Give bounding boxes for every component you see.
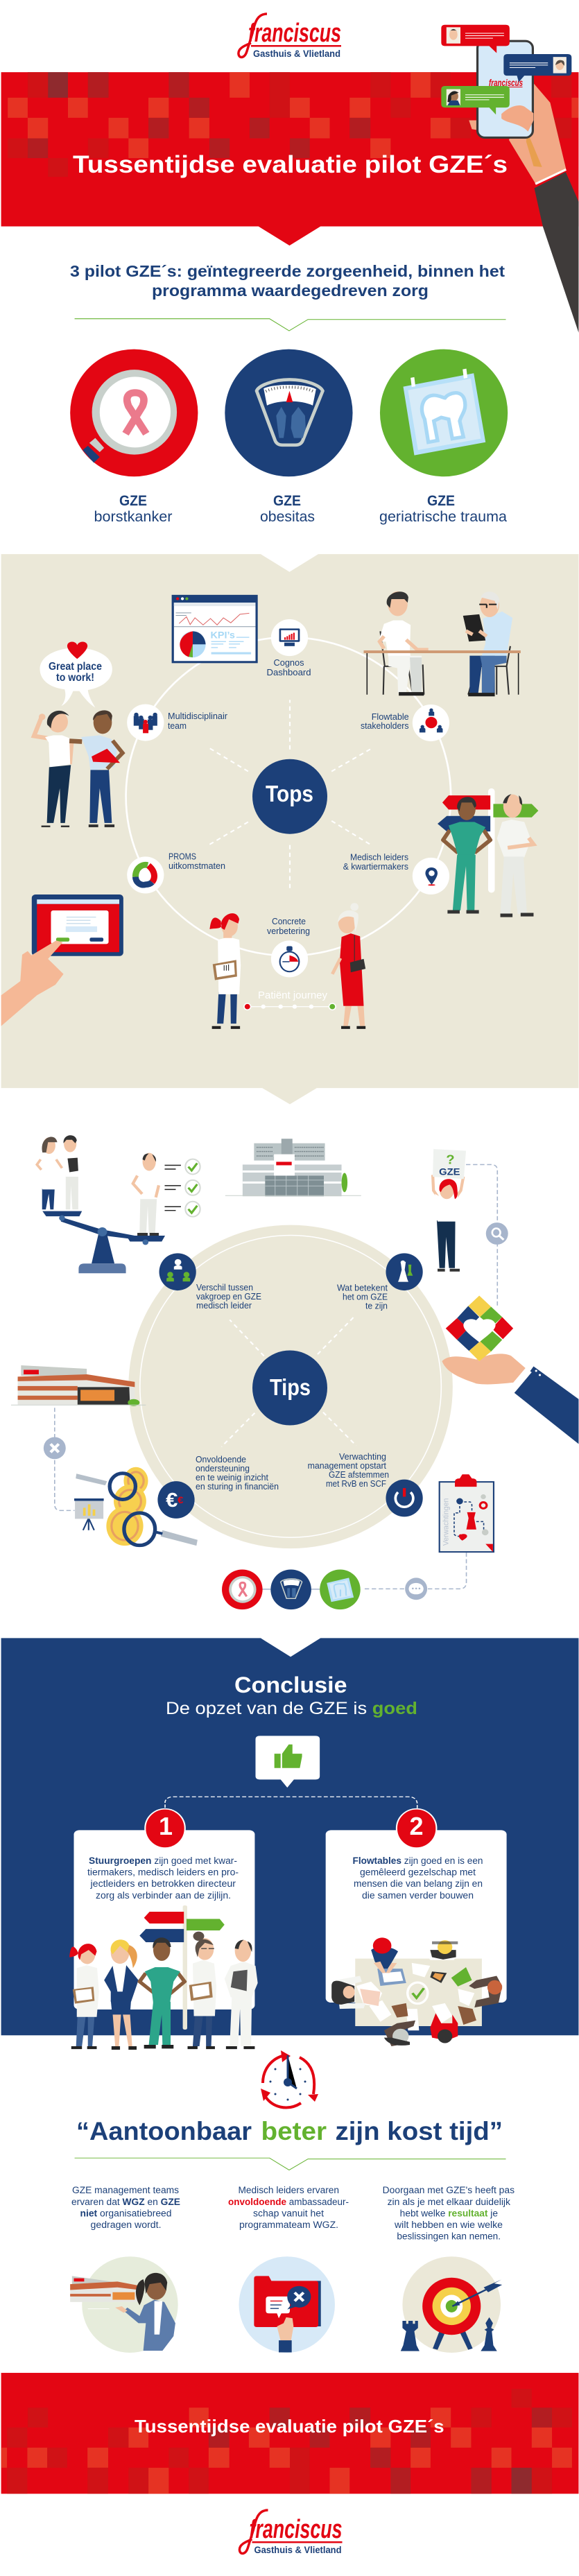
- finding 3 text: beslissingen kan nemen.: [397, 2231, 501, 2241]
- panel: Conclusie: [1, 1638, 578, 2050]
- footer banner: Tussentijdse evaluatie pilot GZE´s: [135, 2416, 444, 2437]
- icon: x-ray of pelvis: [380, 349, 508, 476]
- PROMS icon and label: uitkomstmaten: [168, 861, 225, 871]
- card 1: Stuurgroepen: tiermakers, medisch leiders en pro-: [87, 1867, 239, 1878]
- Medisch leiders icon and label: [343, 852, 449, 894]
- illustration: KPI dashboard: KPI’s: [211, 630, 235, 641]
- Wat betekent het om GZE label with icon: [337, 1253, 423, 1311]
- finding 3 text: wilt hebben en wie welke: [394, 2220, 503, 2230]
- label: GZE borstkanker: borstkanker: [94, 509, 173, 525]
- hero title: Tussentijdse evaluatie pilot GZE´s: [73, 151, 508, 178]
- illustration: people at signpost: [438, 788, 538, 917]
- dashed connector: [165, 1797, 417, 1809]
- quote heading: beter: [261, 2117, 327, 2145]
- illustration: KPI dashboard: [172, 595, 258, 663]
- card 2: Flowtables: mensen die van belang zijn en: [354, 1878, 483, 1889]
- finding 3 text: zin als je met elkaar duidelijk: [388, 2197, 510, 2207]
- finding 2 text: [228, 2185, 349, 2230]
- finding 3 illustration: [401, 2256, 502, 2353]
- Verschil tussen vakgroep label with icon: [159, 1253, 261, 1311]
- Verschil tussen vakgroep label with icon: medisch leider: [196, 1300, 252, 1311]
- Tops centre circle: Tops: [266, 781, 313, 806]
- beige background and ring: [1, 554, 578, 1105]
- card 1: Stuurgroepen: Stuurgroepen zijn goed met kwar-: [89, 1856, 237, 1866]
- finding 2 text: schap vanuit het: [253, 2208, 324, 2219]
- illustration: Great place to work team: Great place: [49, 661, 102, 673]
- panel: Tips: [11, 1135, 578, 1609]
- Medisch leiders icon and label: Medisch leiders: [350, 852, 408, 863]
- illustration: woman holding GZE question sign: [433, 1149, 508, 1306]
- intro heading: [70, 262, 505, 300]
- label: GZE obesitas: obesitas: [260, 509, 315, 525]
- Verwachting management label with power icon: GZE afstemmen: [329, 1469, 389, 1480]
- illustration: Great place to work team: [34, 641, 123, 827]
- header logo: Gasthuis & Vlietland: [253, 48, 340, 59]
- card 2: Flowtables: 2: [409, 1812, 424, 1840]
- Onvoldoende ondersteuning label with euro icon: en te weinig inzicht: [196, 1472, 268, 1483]
- Onvoldoende ondersteuning label with euro icon: Onvoldoende: [196, 1454, 246, 1464]
- intro heading: programma waardegedreven zorg: [152, 282, 429, 300]
- label: GZE obesitas: GZE: [273, 493, 301, 509]
- red banner background: [1, 72, 578, 245]
- Tips centre circle: Tips: [270, 1374, 311, 1400]
- Flowtable stakeholders icon and label: stakeholders: [361, 720, 409, 731]
- finding 1 text: [71, 2185, 180, 2230]
- label: GZE borstkanker: GZE: [119, 493, 147, 509]
- panel: Tops: [1, 554, 578, 1105]
- illustration: expectations clipboard: Verwachtingen: [442, 1498, 451, 1546]
- icon: thumbs up bubble: [255, 1736, 320, 1788]
- card 2: Flowtables: [326, 1809, 507, 2003]
- illustration: nurse and patient with patient journey: [209, 903, 365, 1029]
- quote heading: “Aantoonbaar: [76, 2117, 252, 2145]
- label: GZE geriatrische trauma: GZE: [427, 493, 455, 509]
- card 1: Stuurgroepen: 1: [159, 1812, 173, 1840]
- illustration: two people at a table: [364, 591, 521, 696]
- finding 3 text: hebt welke resultaat je: [400, 2208, 498, 2219]
- Cognos Dashboard icon and label: Dashboard: [266, 667, 311, 677]
- label: GZE geriatrische trauma: [379, 493, 507, 525]
- illustration: coins, magnifiers and presentation board: [44, 1408, 198, 1546]
- footer logo: [239, 2510, 343, 2555]
- finding 1 text: ervaren dat WGZ en GZE: [71, 2197, 180, 2207]
- finding 1 text: gedragen wordt.: [90, 2220, 161, 2230]
- illustration: expectations clipboard: [364, 1474, 494, 1589]
- Onvoldoende ondersteuning label with euro icon: €: [178, 1495, 183, 1506]
- Verwachting management label with power icon: management opstart: [308, 1460, 386, 1471]
- header logo: franciscus: [248, 19, 341, 48]
- Verwachting management label with power icon: Verwachting: [339, 1451, 386, 1462]
- Flowtable stakeholders icon and label: Flowtable: [372, 711, 409, 722]
- conclusion heading: De opzet van de GZE is goed: [166, 1699, 417, 1718]
- finding 2 text: Medisch leiders ervaren: [239, 2185, 339, 2195]
- icon: clock with red cycle arrows: [261, 2050, 318, 2107]
- finding 1 text: GZE management teams: [72, 2185, 179, 2195]
- navy background: [1, 1638, 578, 2035]
- conclusion heading: Conclusie: [234, 1672, 347, 1697]
- Multidisciplinair team icon and label: team: [168, 720, 187, 731]
- Concrete verbetering icon and label: [267, 916, 310, 977]
- Onvoldoende ondersteuning label with euro icon: €: [166, 1489, 178, 1512]
- Verwachting management label with power icon: [308, 1451, 423, 1516]
- Onvoldoende ondersteuning label with euro icon: [157, 1454, 279, 1519]
- panel: three findings: [70, 2185, 515, 2353]
- Onvoldoende ondersteuning label with euro icon: en sturing in financiën: [196, 1481, 279, 1492]
- icon: weighing scale: [225, 349, 353, 476]
- card 1: Stuurgroepen: zorg als verbinder aan de zijlijn.: [96, 1890, 231, 1901]
- illustration: woman holding GZE question sign: ?: [446, 1152, 455, 1167]
- label: GZE geriatrische trauma: geriatrische trauma: [379, 509, 507, 525]
- PROMS icon and label: [127, 852, 225, 893]
- Wat betekent het om GZE label with icon: het om GZE: [343, 1291, 388, 1302]
- finding 2 text: programmateam WGZ.: [239, 2220, 338, 2230]
- finding 2 illustration: [239, 2256, 335, 2353]
- beige disc with ring and arrows: [128, 1225, 453, 1548]
- illustration: balance scale with people and checklist: [37, 1135, 200, 1273]
- label: GZE obesitas: [260, 493, 315, 525]
- illustration: Gasthuis hospital building: [225, 1139, 361, 1196]
- finding 1 illustration: [70, 2256, 178, 2353]
- footer logo: Gasthuis & Vlietland: [254, 2544, 341, 2555]
- Tips centre circle: [252, 1351, 327, 1426]
- Concrete verbetering icon and label: verbetering: [267, 926, 310, 936]
- illustration: woman holding GZE question sign: GZE: [439, 1166, 460, 1177]
- Multidisciplinair team icon and label: [127, 704, 228, 741]
- Medisch leiders icon and label: & kwartiermakers: [343, 861, 408, 872]
- card 1: Stuurgroepen: [74, 1809, 254, 2009]
- label: GZE borstkanker: [94, 493, 173, 525]
- card 2: Flowtables: gemêleerd gezelschap met: [360, 1867, 476, 1878]
- Verschil tussen vakgroep label with icon: vakgroep en GZE: [196, 1291, 261, 1302]
- illustration: team at signpost: [69, 1905, 258, 2050]
- illustration: nurse and patient with patient journey: Patiënt journey: [258, 989, 327, 1001]
- PROMS icon and label: PROMS: [168, 852, 196, 861]
- card 2: Flowtables: die samen verder bouwen: [362, 1890, 474, 1901]
- Cognos Dashboard icon and label: Cognos: [273, 657, 304, 668]
- header logo: [239, 14, 341, 59]
- Cognos Dashboard icon and label: [266, 619, 311, 677]
- panel: three pilot GZE icons: [70, 349, 508, 525]
- Wat betekent het om GZE label with icon: te zijn: [365, 1301, 388, 1311]
- illustration: Great place to work team: to work!: [56, 672, 94, 684]
- illustration: tablet with pointing hand: [1, 894, 123, 1026]
- finding 3 text: [383, 2185, 515, 2241]
- card 2: Flowtables: Flowtables zijn goed en is een: [352, 1856, 483, 1866]
- hand holding phone with chat bubbles: franciscus: [489, 77, 523, 88]
- Tops centre circle: [252, 759, 327, 834]
- mini GZE icons with chat node: [222, 1569, 427, 1609]
- Multidisciplinair team icon and label: Multidisciplinair: [168, 711, 228, 721]
- hero banner: [1, 25, 578, 333]
- illustration: Vlietland hospital building: [11, 1365, 146, 1406]
- Concrete verbetering icon and label: Concrete: [272, 916, 306, 926]
- illustration: puzzle heart on hand: [442, 1296, 578, 1444]
- intro heading: 3 pilot GZE´s: geïntegreerde zorgeenheid, binnen het: [70, 262, 505, 280]
- illustration: meeting table from above: [331, 1937, 502, 2046]
- Onvoldoende ondersteuning label with euro icon: ondersteuning: [196, 1463, 250, 1473]
- card 1: Stuurgroepen: jectleiders en betrokken directeur: [89, 1878, 236, 1889]
- footer banner: [1, 2373, 578, 2493]
- conclusion heading: [166, 1672, 417, 1718]
- Wat betekent het om GZE label with icon: Wat betekent: [337, 1283, 388, 1293]
- finding 1 text: niet organisatiebreed: [80, 2208, 172, 2219]
- Verschil tussen vakgroep label with icon: Verschil tussen: [196, 1282, 253, 1293]
- quote heading: zijn kost tijd”: [336, 2117, 503, 2145]
- Flowtable stakeholders icon and label: [361, 704, 449, 741]
- icon: breast cancer magnifier: [70, 349, 198, 476]
- quote heading: [76, 2117, 503, 2145]
- hand holding phone with chat bubbles: [441, 25, 578, 333]
- finding 3 text: Doorgaan met GZE's heeft pas: [383, 2185, 515, 2195]
- finding 2 text: onvoldoende ambassadeur-: [228, 2197, 349, 2207]
- footer logo: franciscus: [250, 2515, 343, 2544]
- Verwachting management label with power icon: met RvB en SCF: [326, 1478, 386, 1489]
